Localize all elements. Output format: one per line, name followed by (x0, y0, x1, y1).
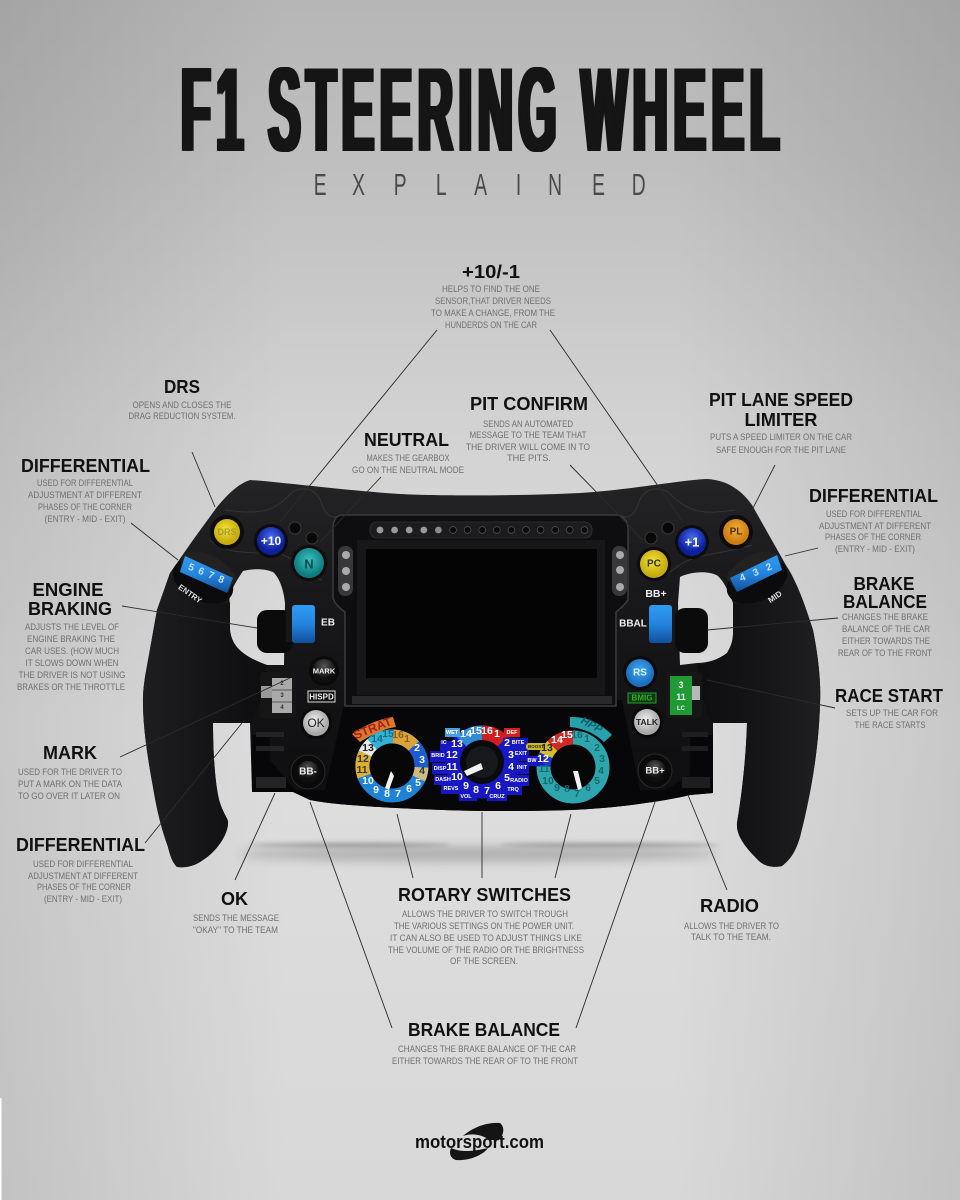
entry rotary (166, 549, 240, 613)
left white rotary: 4 (280, 705, 284, 711)
callout: race start: SETS UP THE CAR FOR (846, 708, 938, 719)
left white rotary (260, 672, 296, 718)
rotary dial: centre settings: 7 (484, 785, 490, 797)
callout: +10/-1 (431, 262, 555, 331)
callout: differential lower left: DIFFERENTIAL (16, 835, 145, 855)
callout: differential upper left (21, 456, 150, 525)
rotary dial: HPP: 9 (554, 782, 560, 794)
callout: rotary switches: ALLOWS THE DRIVER TO SWITCH TROUGH (402, 909, 568, 920)
callout: mark: MARK (43, 743, 97, 763)
callout: rotary switches: ROTARY SWITCHES (398, 885, 571, 905)
rotary dial: STRAT: 3 (419, 754, 425, 766)
callout: brake balance bottom: CHANGES THE BRAKE BALANCE OF THE CAR (398, 1044, 576, 1055)
callout: brake balance bottom: EITHER TOWARDS THE REAR OF TO THE FRONT (392, 1056, 578, 1067)
callout: rotary switches: THE VOLUME OF THE RADIO OR THE BRIGHTNESS (388, 945, 584, 956)
mid rotary: MID (766, 589, 784, 605)
callout: race start: RACE START (835, 686, 943, 706)
rotary dial: HPP: 4 (598, 765, 604, 777)
callout: mark: PUT A MARK ON THE DATA (18, 779, 123, 790)
subtitle: E (314, 169, 327, 202)
rotary dial: centre settings: EXIT (515, 751, 528, 757)
callout: differential right: DIFFERENTIAL (809, 486, 938, 506)
rotary dial: centre settings: VOL (460, 794, 472, 800)
rotary dial: HPP: 10 (542, 775, 554, 787)
label: HISPD: HISPD (309, 692, 334, 702)
button: DRS (210, 515, 244, 549)
rotary dial: centre settings: 15 (470, 725, 482, 737)
rotary dial: HPP: 3 (599, 753, 605, 765)
button: PC: PC (647, 558, 661, 570)
callout: +10/-1: HELPS TO FIND THE ONE (442, 284, 540, 295)
button: PC (637, 547, 671, 581)
callout: pit confirm: SENDS AN AUTOMATED (483, 419, 573, 430)
entry rotary: ENTRY (176, 583, 204, 606)
rotary dial: centre settings: RADIO (510, 778, 529, 784)
callout: differential lower left: PHASES OF THE CORNER (37, 882, 131, 893)
rotary dial: centre settings: 10 (451, 771, 463, 783)
callout: engine braking: ADJUSTS THE LEVEL OF (25, 622, 119, 633)
rotary dial: HPP: 13 (541, 742, 553, 754)
callout: differential upper left: PHASES OF THE CORNER (38, 502, 132, 513)
brake balance rotary (619, 605, 708, 653)
button: RS (623, 656, 657, 690)
callout: pit confirm: THE DRIVER WILL COME IN TO (466, 442, 590, 453)
button: +10: +10 (261, 534, 282, 548)
rotary dial: STRAT: 4 (419, 765, 425, 777)
rotary dial: STRAT: 13 (362, 742, 374, 754)
callout: brake balance right: BALANCE OF THE CAR (842, 624, 930, 635)
button: RS: RS (633, 668, 647, 678)
rotary dial: HPP: 11 (538, 763, 550, 775)
button: +10 (254, 524, 288, 558)
small black buttons (289, 522, 674, 544)
rotary dial: STRAT: 12 (357, 753, 369, 765)
subtitle: D (632, 169, 646, 202)
callout: engine braking: CAR USES. (HOW MUCH (25, 646, 119, 657)
rotary dial: centre settings (430, 721, 529, 803)
callout: differential right: ADJUSTMENT AT DIFFERENT (819, 521, 931, 532)
left white rotary: 2 (280, 681, 284, 687)
logo: motorsport.com: motorsport.com (415, 1131, 544, 1152)
rotary dial: HPP: 5 (594, 775, 600, 787)
rotary dial: HPP: HPP (579, 715, 605, 736)
button: BB+: BB+ (645, 766, 665, 776)
engine braking rotary (257, 605, 339, 653)
rotary dial: centre settings: TRQ (507, 787, 520, 793)
callout: brake balance bottom: BRAKE BALANCE (408, 1020, 560, 1040)
callout: pit lane speed limiter: SAFE ENOUGH FOR THE PIT LANE (716, 445, 846, 456)
steering wheel (143, 479, 820, 867)
rotary dial: centre settings: INIT (517, 765, 528, 771)
rotary dial: centre settings: BRID (431, 753, 445, 759)
lower right block details (682, 732, 710, 788)
button: N: N (304, 556, 314, 572)
button: BB-: BB- (299, 766, 317, 778)
mid rotary (720, 549, 794, 613)
button: MARK: MARK (313, 666, 336, 676)
subtitle: L (436, 169, 447, 202)
callout: engine braking: ENGINE (32, 580, 104, 600)
callout: radio: TALK TO THE TEAM. (691, 932, 771, 943)
shift lights (370, 522, 592, 538)
callout: pit lane speed limiter: PUTS A SPEED LIMITER ON THE CAR (710, 432, 852, 443)
button: +1: +1 (685, 534, 699, 550)
rotary dial: HPP: 16 (571, 729, 583, 741)
floor shadow (238, 843, 720, 862)
callout: ok: OK (221, 889, 248, 909)
rotary dial: centre settings: DEF (506, 730, 518, 736)
rotary dial: HPP (526, 715, 615, 809)
screen bezel (333, 515, 628, 706)
rotary dial: centre settings: 12 (446, 749, 458, 761)
callout: DRS: DRAG REDUCTION SYSTEM. (128, 411, 236, 422)
left grip (143, 573, 267, 867)
callout: pit lane speed limiter: PIT LANE SPEED (709, 390, 853, 410)
callout: DRS (128, 377, 236, 422)
callout: differential lower left: USED FOR DIFFERENTIAL (33, 859, 133, 870)
callout: +10/-1: +10/-1 (462, 262, 520, 282)
callout: engine braking: BRAKING (28, 599, 112, 619)
rotary dial: HPP: 12 (537, 753, 549, 765)
callout: radio: ALLOWS THE DRIVER TO (684, 921, 779, 932)
brake balance rotary: BBAL (619, 618, 647, 630)
callout: neutral: NEUTRAL (364, 430, 449, 450)
callout: engine braking: ENGINE BRAKING THE (27, 634, 115, 645)
callout: brake balance right: REAR OF TO THE FRONT (838, 648, 932, 659)
lower left block details (256, 732, 286, 788)
callout: ok: "OKAY" TO THE TEAM (193, 925, 278, 936)
rotary dial: STRAT: 8 (384, 788, 390, 800)
rotary dial: HPP: 7 (574, 788, 580, 800)
callout: rotary switches (388, 885, 584, 967)
callout: +10/-1: HUNDERDS ON THE CAR (445, 320, 537, 331)
callout: radio: RADIO (700, 896, 759, 916)
leader lines (120, 330, 838, 1028)
rotary dial: STRAT: 16 (392, 729, 404, 741)
button: TALK: TALK (636, 717, 659, 727)
rotary dial: centre settings: DISP (434, 766, 447, 772)
callout: differential right: PHASES OF THE CORNER (825, 532, 921, 543)
callout: race start: THE RACE STARTS (854, 720, 926, 731)
button: BB- (291, 755, 325, 789)
rotary dial: centre settings: 3 (508, 749, 514, 761)
subtitle: A (474, 169, 488, 202)
callout: pit lane speed limiter: LIMITER (744, 410, 818, 430)
callout: engine braking: THE DRIVER IS NOT USING (18, 670, 126, 681)
callout: DRS: OPENS AND CLOSES THE (132, 400, 232, 411)
rotary dial: centre settings: 11 (446, 761, 458, 773)
callout: rotary switches: OF THE SCREEN. (450, 956, 518, 967)
callout: engine braking: IT SLOWS DOWN WHEN (26, 658, 119, 669)
callout: brake balance right: BRAKE (854, 574, 914, 594)
rotary dial: STRAT: 6 (406, 783, 412, 795)
button: PL (719, 515, 753, 549)
rotary dial: centre settings: 8 (473, 784, 479, 796)
callout: brake balance right: BALANCE (843, 592, 927, 612)
subtitle: P (394, 169, 407, 202)
callout: neutral (352, 430, 464, 476)
rotary dial: centre settings: 5 (504, 772, 510, 784)
callout: ok: SENDS THE MESSAGE (193, 913, 279, 924)
subtitle: N (548, 169, 562, 202)
rotary dial: STRAT: 1 (404, 733, 410, 745)
button: N (291, 545, 327, 581)
subtitle: I (516, 169, 521, 202)
rotary dial: HPP: 1 (584, 733, 590, 745)
callout: differential upper left: USED FOR DIFFERENTIAL (37, 478, 133, 489)
callout: brake balance bottom (392, 1020, 578, 1067)
rotary dial: centre settings: WET (446, 730, 459, 736)
rotary dial: centre settings: 9 (463, 780, 469, 792)
rotary dial: centre settings: CRUZ (489, 794, 505, 800)
rotary dial: HPP: 15 (561, 729, 573, 741)
label: BB+: BB+ (645, 588, 667, 600)
callout: differential lower left (16, 835, 145, 905)
rotary dial: centre settings: REVS (444, 786, 459, 792)
lower centre panel (252, 700, 713, 811)
button: BB+ (638, 754, 672, 788)
entry rotary: 5 6 7 8 (186, 562, 226, 586)
callout: differential right (809, 486, 938, 555)
right green rotary: 3 (678, 680, 684, 690)
callout: differential lower left: ADJUSTMENT AT DIFFERENT (28, 871, 138, 882)
rotary dial: centre settings: 14 (460, 728, 472, 740)
right green rotary (666, 672, 702, 718)
callout: differential right: (ENTRY - MID - EXIT) (835, 544, 915, 555)
display screen (366, 549, 597, 678)
callout: mark: USED FOR THE DRIVER TO (18, 767, 122, 778)
callout: pit confirm: MESSAGE TO THE TEAM THAT (470, 430, 587, 441)
callout: ok (193, 889, 279, 936)
callout: +10/-1: TO MAKE A CHANGE, FROM THE (431, 308, 555, 319)
button: MARK (309, 656, 339, 686)
right grip (697, 573, 820, 867)
engine braking rotary: EB (321, 618, 335, 628)
wheel body (143, 479, 820, 867)
rotary dial: STRAT: 15 (382, 728, 394, 740)
rotary dial: HPP: 14 (551, 734, 563, 746)
callout: differential lower left: (ENTRY - MID - EXIT) (44, 894, 122, 905)
callout: brake balance right (838, 574, 932, 659)
label: BMIG: BMIG (632, 694, 652, 702)
rotary dial: centre settings: DASH (435, 777, 451, 783)
rotary dial: HPP: BW (527, 758, 537, 764)
subtitle (314, 169, 646, 202)
button: OK: OK (307, 716, 325, 730)
right green rotary: 11 (676, 692, 686, 702)
rotary dial: HPP: 6 (585, 782, 591, 794)
subtitle: E (592, 169, 605, 202)
rotary dial: STRAT: 2 (414, 742, 420, 754)
callout: differential upper left: ADJUSTMENT AT DIFFERENT (28, 490, 142, 501)
button: PL: PL (730, 526, 742, 538)
callout: engine braking: BRAKES OR THE THROTTLE (17, 682, 125, 693)
rotary dial: centre settings: BITE (512, 740, 525, 746)
rotary dial: STRAT: STRAT (351, 714, 394, 742)
rotary dial: STRAT: 10 (362, 775, 374, 787)
rotary dial: centre settings: 2 (504, 737, 510, 749)
callout: neutral: GO ON THE NEUTRAL MODE (352, 465, 464, 476)
callout: brake balance right: CHANGES THE BRAKE (842, 612, 928, 623)
callout: pit lane speed limiter (709, 390, 853, 456)
callout: pit confirm (466, 394, 590, 464)
callout: engine braking (17, 580, 126, 693)
right side lights (612, 546, 627, 596)
button: OK (300, 707, 332, 739)
rotary dial: STRAT: 9 (373, 784, 379, 796)
callout: brake balance right: EITHER TOWARDS THE (842, 636, 930, 647)
callout: neutral: MAKES THE GEARBOX (366, 453, 450, 464)
title: F1 STEERING WHEEL (181, 43, 785, 177)
rotary dial: STRAT (350, 714, 434, 808)
rotary dial: centre settings: 16 (481, 725, 493, 737)
callout: differential upper left: DIFFERENTIAL (21, 456, 150, 476)
button: DRS: DRS (217, 527, 237, 537)
rotary dial: centre settings: IC (441, 740, 447, 746)
callout: rotary switches: THE VARIOUS SETTINGS ON THE POWER UNIT. (394, 921, 574, 932)
callout: differential right: USED FOR DIFFERENTIAL (826, 509, 922, 520)
logo: motorsport.com (415, 1123, 544, 1160)
label: BMIG (628, 693, 656, 703)
rotary dial: STRAT: 5 (415, 777, 421, 789)
callout: DRS: DRS (164, 377, 200, 397)
rotary dial: centre settings: 1 (494, 728, 500, 740)
rotary dial: HPP: 2 (594, 742, 600, 754)
button: +1 (675, 525, 709, 559)
rotary dial: STRAT: 7 (395, 788, 401, 800)
callout: rotary switches: IT CAN ALSO BE USED TO ADJUST THINGS LIKE (390, 933, 582, 944)
left side lights (338, 546, 353, 596)
rotary dial: HPP: BOOST (528, 744, 544, 749)
right green rotary: LC (677, 706, 686, 712)
callout: +10/-1: SENSOR,THAT DRIVER NEEDS (435, 296, 551, 307)
callout: pit confirm: PIT CONFIRM (470, 394, 588, 414)
rotary dial: centre settings: 13 (451, 738, 463, 750)
upper panel contour lines (210, 489, 752, 580)
callout: mark: TO GO OVER IT LATER ON (18, 791, 120, 802)
rotary dial: centre settings: 4 (508, 761, 514, 773)
callout: differential upper left: (ENTRY - MID - EXIT) (44, 514, 126, 525)
callout: radio (684, 896, 779, 943)
rotary dial: HPP: 8 (564, 783, 570, 795)
rotary dial: STRAT: 11 (356, 764, 368, 776)
left white rotary: 3 (280, 693, 284, 699)
subtitle: X (352, 169, 365, 202)
callout: pit confirm: THE PITS. (507, 453, 551, 464)
rotary dial: STRAT: 14 (371, 733, 383, 745)
rotary dial: centre settings: 6 (495, 780, 501, 792)
button: TALK (631, 706, 663, 738)
mid rotary: 4 3 2 (738, 561, 774, 584)
callout: mark (18, 743, 123, 802)
callout: race start (835, 686, 943, 731)
